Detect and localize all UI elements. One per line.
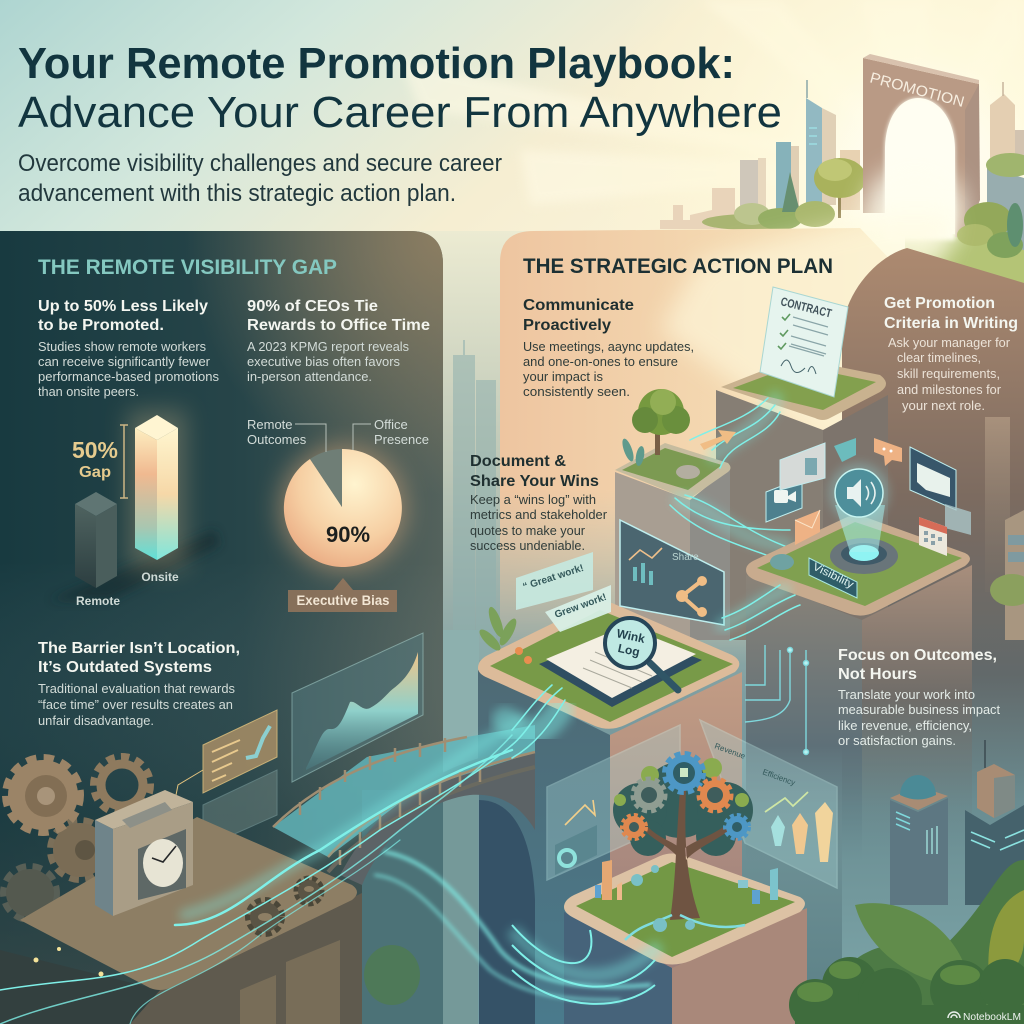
clock platform: [0, 817, 362, 1024]
gate label: PROMOTION: [868, 69, 966, 111]
pie remote slice: [310, 449, 342, 507]
panel: promotion criteria backdrop: [842, 248, 1024, 1024]
visibility tag: Visibility: [811, 561, 856, 591]
stat: less likely body: Studies show remote workers: [38, 339, 206, 354]
bar chart: remote vs onsite: [50, 410, 220, 608]
building: antenna: [965, 740, 1024, 905]
stream: tree to visibility: [670, 495, 790, 560]
panel lower tone: [0, 560, 443, 1024]
visibility tag: [809, 558, 857, 598]
under bridge water: [362, 790, 478, 1024]
stat: CEOs heading: [247, 298, 430, 334]
wins book: [539, 626, 702, 707]
platform: outcomes tree: [547, 720, 837, 1024]
foliage bottom right: [789, 860, 1024, 1024]
bush highlight: [797, 961, 980, 1002]
communicate body: and one-on-ones to ensure: [523, 354, 678, 369]
platform: visibility: [746, 438, 972, 860]
subtitle: [18, 150, 502, 207]
platform flora: [631, 865, 695, 932]
gate top edge: [863, 54, 979, 84]
speaker orb: [829, 463, 889, 523]
stream: bridge to wins: [505, 685, 565, 758]
text: focus on outcomes: [838, 647, 1000, 748]
stream arrow: [700, 430, 736, 450]
stat: CEOs heading: Rewards to Office Time: [247, 317, 430, 334]
gear: large: [7, 759, 79, 831]
wins platform body: [478, 670, 742, 1024]
tree platform top: [615, 443, 730, 498]
light vertical band: [443, 630, 479, 1024]
executive bias tag: [288, 578, 397, 612]
panel label efficiency: Efficiency: [761, 767, 796, 788]
glass panel right: [700, 720, 837, 888]
magnifier label: Wink: [615, 626, 647, 646]
small rock: [676, 465, 700, 479]
circuit lines right: [745, 645, 808, 754]
skyline right tower: [990, 82, 1024, 160]
stream: contract to tree: [690, 398, 780, 468]
gate body: [863, 58, 979, 237]
tree platform grass: [622, 448, 722, 490]
title line one: Your Remote Promotion Playbook:: [18, 39, 735, 88]
building: dome: [890, 775, 948, 905]
skyline distant buildings: [660, 188, 735, 229]
clock rollers: [122, 802, 172, 828]
visibility platform grass: [757, 522, 962, 606]
communicate body: Use meetings, aaync updates,: [523, 339, 694, 354]
clock face: [143, 839, 183, 887]
tree platform right face: [690, 468, 730, 640]
tree trunk: [640, 790, 735, 920]
card: chat orange: [874, 438, 902, 466]
stat: less likely heading: Up to 50% Less Likely: [38, 298, 208, 315]
tree crown highlights: [614, 758, 749, 807]
panel label revenue: Revenue: [713, 741, 747, 761]
bars on platform: [595, 860, 778, 904]
gate right side: [965, 84, 980, 237]
barrier body: “face time” over results creates an: [38, 697, 233, 712]
gear: blue small: [725, 815, 749, 839]
text: focus on outcomes: Focus on Outcomes,: [838, 647, 997, 664]
window: share panel: [620, 520, 724, 625]
light band over water: [443, 790, 479, 1024]
communicate body: your impact is: [523, 369, 603, 384]
document body: success undeniable.: [470, 538, 585, 553]
broken gear large: [248, 900, 282, 934]
barrier text: [38, 640, 240, 728]
criteria body: your next role.: [902, 398, 985, 413]
heading: strategic action plan: THE STRATEGIC ACTION PLAN: [523, 255, 833, 278]
bridge deck stream: [273, 725, 535, 857]
platform body right: [130, 893, 362, 1024]
gear: hollow: [95, 758, 149, 812]
chart panel: growth: [292, 633, 423, 782]
document body: Keep a “wins log” with: [470, 492, 596, 507]
stream arcs at base: [512, 925, 660, 1004]
bridge rails: [273, 737, 535, 872]
quote bubble 1: [516, 552, 593, 610]
promotion gate: [863, 54, 980, 255]
label: remote: Remote: [76, 594, 120, 608]
outcomes platform grass: [576, 862, 795, 957]
plant leaves: [477, 605, 519, 653]
contract platform left face: [716, 390, 823, 640]
communicate body: [523, 339, 694, 399]
wins platform right face: [610, 672, 742, 1024]
broken gear small: [296, 878, 322, 904]
text: document and share wins: [470, 453, 608, 553]
bush front: [789, 957, 1024, 1024]
platform panel details: [240, 940, 340, 1024]
card: chat teal: [834, 438, 856, 462]
text: communicate proactively: [523, 297, 694, 399]
pie main slice: [284, 449, 402, 567]
stat: less likely body: can receive significantly fewer: [38, 354, 211, 369]
skyline: [660, 80, 1024, 230]
card: chat window: [910, 447, 956, 510]
document body: metrics and stakeholder: [470, 507, 608, 522]
gears: [5, 758, 149, 918]
tree crown: [613, 762, 753, 856]
platform: wins log: [477, 520, 739, 729]
executive bias tag: Executive Bias: [296, 593, 390, 608]
sunlight rays: [400, 0, 1024, 205]
bar: onsite: [135, 415, 178, 560]
stat: less likely body: [38, 339, 219, 399]
data stream: main: [0, 720, 520, 1024]
bar shadow: [50, 530, 220, 600]
card: calendar: [919, 517, 947, 556]
pie leader lines: [295, 424, 371, 452]
right top foliage: [957, 153, 1024, 258]
gate opening light: [865, 98, 965, 255]
tree platform left face: [615, 472, 690, 640]
criteria body: Ask your manager for: [888, 335, 1011, 350]
panel base: [0, 231, 443, 1024]
glowing trail dots: [34, 947, 104, 976]
panel warm corner: [0, 231, 443, 640]
contract label: CONTRACT: [779, 294, 834, 321]
bar: remote: [75, 492, 117, 588]
buildings bottom right: [890, 740, 1024, 905]
card: envelope: [795, 510, 820, 545]
gear: blue: [665, 754, 703, 792]
pie label remote outcomes: Outcomes: [247, 432, 307, 447]
label: onsite: Onsite: [141, 570, 179, 584]
text: get promotion criteria: [884, 295, 1018, 413]
outcomes platform left face: [564, 912, 672, 1024]
light beam: [660, 215, 955, 470]
barrier heading: [38, 640, 240, 676]
card: window: [780, 443, 825, 490]
focus body: or satisfaction gains.: [838, 733, 956, 748]
text: document and share wins: Document &: [470, 453, 566, 470]
gear: medium: [52, 822, 108, 878]
gap label: Gap: [79, 464, 111, 481]
document body: [470, 492, 608, 553]
criteria body: and milestones for: [897, 382, 1002, 397]
panel: strategic action plan background: [500, 228, 888, 650]
hologram base: [830, 538, 898, 574]
title: [18, 39, 782, 137]
stat: less likely body: than onsite peers.: [38, 384, 139, 399]
criteria body: clear timelines,: [897, 350, 981, 365]
right city building silhouettes: [985, 417, 1024, 640]
hologram beam: [835, 505, 885, 552]
gear: orange: [699, 779, 731, 811]
subtitle: advancement with this strategic action plan.: [18, 180, 456, 207]
outcomes platform right face: [672, 908, 807, 1024]
platform top: [20, 817, 357, 990]
sun glow: [590, 0, 1024, 500]
barrier heading: It’s Outdated Systems: [38, 659, 212, 676]
quote bubble 2: Grew work!: [553, 592, 608, 621]
stat: CEOs body: in-person attendance.: [247, 369, 372, 384]
clock hands: [152, 846, 176, 862]
stream under bridge: [375, 852, 650, 1000]
panel: remote visibility gap: [0, 231, 443, 1024]
big leaf: [855, 903, 970, 986]
pie value: 90%: [326, 522, 370, 547]
panel heading: THE REMOTE VISIBILITY GAP: [38, 256, 337, 279]
stat: less likely body: performance-based promotions: [38, 369, 219, 384]
visibility platform left face: [746, 575, 862, 860]
text: focus on outcomes: Not Hours: [838, 666, 917, 683]
contract signature: [781, 360, 816, 374]
bridge arch: [340, 745, 535, 885]
gear: dark rear: [5, 868, 55, 918]
platform body left: [0, 950, 160, 1024]
criteria body: skill requirements,: [897, 366, 1000, 381]
magnifier: Log: [617, 641, 641, 659]
barrier body: Traditional evaluation that rewards: [38, 681, 235, 696]
stat: CEOs body: executive bias often favors: [247, 354, 400, 369]
text: document and share wins: Share Your Wins: [470, 473, 599, 490]
title line two: Advance Your Career From Anywhere: [18, 88, 782, 137]
contract platform right face: [823, 395, 888, 640]
visibility platform right face: [862, 565, 972, 860]
gap bracket: [120, 425, 128, 498]
barrier body: [38, 681, 235, 728]
gear: grey: [633, 779, 665, 811]
gap value: 50%: [72, 437, 118, 463]
document body: quotes to make your: [470, 523, 586, 538]
criteria body: [888, 335, 1011, 413]
flowers: [515, 647, 532, 664]
stream: wins to visibility: [722, 585, 800, 640]
share label: Share: [672, 552, 699, 563]
tree: [632, 389, 690, 455]
clock frame: [138, 829, 186, 900]
focus body: like revenue, efficiency,: [838, 718, 972, 733]
right top green slope: [905, 226, 1024, 300]
outcomes platform rim: [564, 854, 805, 964]
quote bubble 2: [545, 585, 611, 632]
background lower haze: [0, 231, 1024, 1024]
contract platform grass: [733, 365, 876, 410]
card: small panel: [945, 504, 971, 535]
gear: orange small: [622, 815, 646, 839]
visibility rock: [770, 554, 794, 570]
text: communicate proactively: Communicate: [523, 297, 634, 314]
wins platform grass: [490, 610, 733, 722]
stat: CEOs heading: 90% of CEOs Tie: [247, 298, 378, 315]
pie label office presence: Office: [374, 417, 408, 432]
skyline tower mid: [740, 142, 799, 210]
dark arch inner: [479, 800, 535, 1024]
skyline trees: [702, 158, 866, 230]
platform: contract: [716, 287, 888, 640]
pie label remote outcomes: [247, 417, 307, 447]
pie label remote outcomes: Remote: [247, 417, 293, 432]
stat: CEOs body: [247, 339, 409, 384]
barrier heading: The Barrier Isn’t Location,: [38, 640, 240, 657]
subtitle: Overcome visibility challenges and secure career: [18, 150, 502, 177]
tree roots stream: [625, 915, 745, 940]
quote bubble 1: “ Great work!: [522, 563, 585, 593]
foliage back leaves: [820, 860, 1024, 1024]
stat: CEOs body: A 2023 KPMG report reveals: [247, 339, 409, 354]
text: get promotion criteria: Get Promotion: [884, 295, 995, 312]
time clock machine: [95, 790, 193, 916]
small card: amber: [203, 710, 277, 793]
glass panel left: [547, 725, 680, 880]
plants: [620, 437, 646, 467]
card: video call: [766, 478, 802, 522]
background city silhouettes centre: [453, 340, 496, 660]
communicate body: consistently seen.: [523, 384, 630, 399]
leader line from clock: [175, 770, 203, 800]
notebooklm badge: NotebookLM: [963, 1011, 1021, 1023]
contract platform rim: [721, 358, 886, 420]
stat: less likely heading: [38, 298, 208, 334]
stat: less likely heading: to be Promoted.: [38, 317, 164, 334]
visibility platform rim: [746, 515, 970, 616]
background sky: [0, 0, 1024, 300]
platform: tree: [615, 389, 730, 640]
contract scroll: [760, 287, 848, 397]
skyline blue tower: [806, 80, 860, 210]
onsite glow: [128, 410, 186, 570]
pie label office presence: [374, 417, 429, 447]
text: communicate proactively: Proactively: [523, 317, 611, 334]
wins platform rim: [478, 602, 739, 729]
pie chart: executive bias: [247, 417, 429, 612]
focus body: [838, 687, 1000, 748]
pie label office presence: Presence: [374, 432, 429, 447]
leaf upper right: [988, 890, 1024, 990]
focus body: measurable business impact: [838, 702, 1000, 717]
magnifier: [605, 618, 678, 690]
share icon: [676, 576, 707, 617]
contract checks: [778, 314, 790, 349]
small card: faint: [203, 770, 277, 848]
pie glow: [279, 444, 407, 572]
contract checklist: [789, 317, 828, 356]
barrier body: unfair disadvantage.: [38, 713, 154, 728]
wins platform left face: [478, 670, 610, 1024]
focus body: Translate your work into: [838, 687, 975, 702]
foliage under bridge: [364, 945, 420, 1005]
text: get promotion criteria: Criteria in Writing: [884, 315, 1018, 332]
